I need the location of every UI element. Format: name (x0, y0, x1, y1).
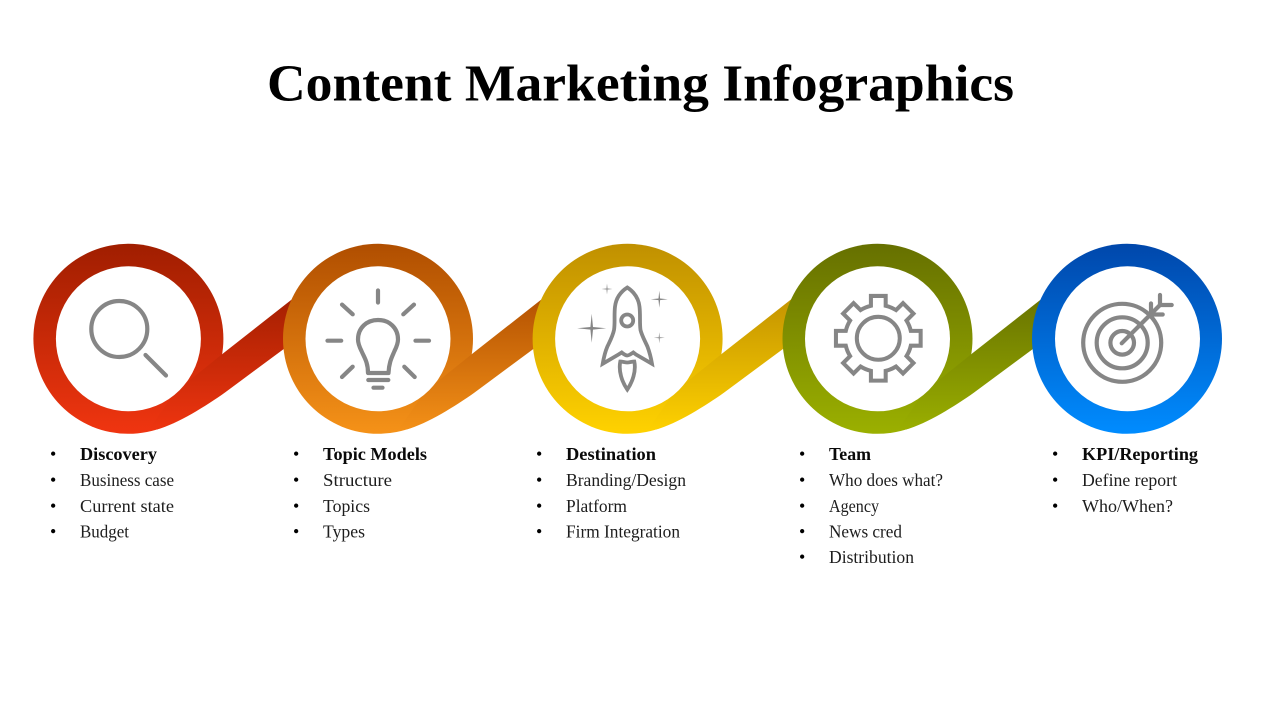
ribbon: green connector (899, 293, 1049, 430)
list: discovery: Business case (80, 470, 174, 490)
list: discovery (50, 444, 174, 542)
list: destination: Branding/Design (566, 470, 686, 490)
list: discovery: • (50, 444, 56, 464)
list: team: Who does what? (829, 470, 943, 490)
ribbon: orange connector (400, 293, 550, 430)
list: team: • (799, 547, 805, 567)
list: KPI reporting (1052, 444, 1198, 516)
ribbon: yellow connector (649, 293, 799, 430)
list: KPI reporting: KPI/Reporting (1082, 444, 1198, 464)
list: topic models: • (293, 522, 299, 542)
list: topic models: Structure (323, 470, 392, 490)
title: Content Marketing Infographics (267, 56, 1014, 112)
step 1: discovery ring (33, 244, 300, 434)
list: KPI reporting: • (1052, 470, 1058, 490)
list: discovery: • (50, 522, 56, 542)
list: destination: Firm Integration (566, 522, 680, 542)
list: discovery: • (50, 470, 56, 490)
list: team (799, 444, 943, 567)
list: discovery: • (50, 496, 56, 516)
list: team: Distribution (829, 547, 914, 567)
list: team: Team (829, 444, 871, 464)
list: destination (536, 444, 686, 542)
list: discovery: Discovery (80, 444, 157, 464)
step 2: topic models ring (283, 244, 550, 434)
list: destination: Platform (566, 496, 627, 516)
list: destination: • (536, 470, 542, 490)
list: team: • (799, 444, 805, 464)
list: KPI reporting: Who/When? (1082, 496, 1173, 516)
icon: gear (836, 296, 921, 381)
list: topic models: • (293, 444, 299, 464)
icon: rocket (577, 284, 668, 390)
list: destination: • (536, 522, 542, 542)
list: topic models: Topic Models (323, 444, 427, 464)
list: topic models (293, 444, 427, 542)
step 4: team ring (782, 244, 1049, 434)
list: discovery: Current state (80, 496, 174, 516)
list: discovery: Budget (80, 522, 129, 542)
list: destination: • (536, 444, 542, 464)
list: team: News cred (829, 522, 902, 542)
list: topic models: Topics (323, 496, 370, 516)
list: team: • (799, 522, 805, 542)
list: KPI reporting: • (1052, 496, 1058, 516)
icon: target with arrow (1083, 295, 1172, 382)
icon: light bulb (328, 290, 429, 388)
list: team: • (799, 470, 805, 490)
list: topic models: • (293, 470, 299, 490)
step 5: KPI ring (1032, 244, 1222, 434)
list: topic models: Types (323, 522, 365, 542)
list: team: Agency (829, 496, 879, 516)
list: destination: Destination (566, 444, 656, 464)
list: KPI reporting: Define report (1082, 470, 1177, 490)
step 3: destination ring (533, 244, 799, 434)
icon: magnifying glass (91, 301, 166, 376)
ribbon: red connector (150, 293, 300, 430)
list: destination: • (536, 496, 542, 516)
list: team: • (799, 496, 805, 516)
list: topic models: • (293, 496, 299, 516)
list: KPI reporting: • (1052, 444, 1058, 464)
